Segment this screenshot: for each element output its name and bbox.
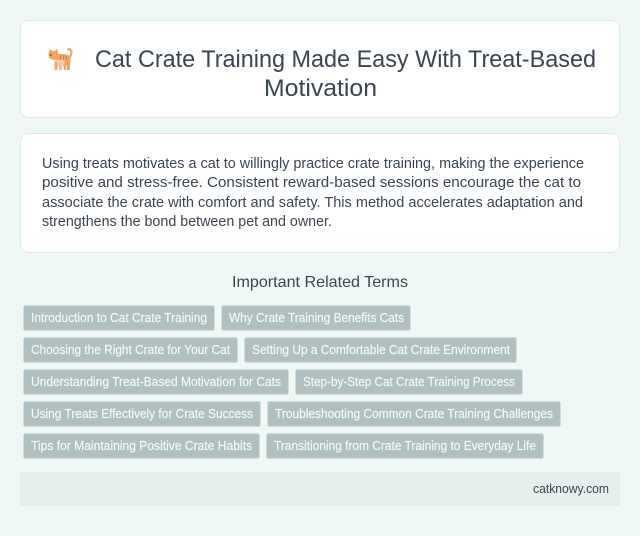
tag: Transitioning from Crate Training to Everyday Life <box>274 439 536 453</box>
tag: Introduction to Cat Crate Training <box>31 311 207 325</box>
tag: Tips for Maintaining Positive Crate Habits <box>31 439 252 453</box>
tag <box>268 402 560 426</box>
tag: Choosing the Right Crate for Your Cat <box>31 343 230 357</box>
heading: related terms: Important Related Terms <box>232 274 408 291</box>
tag: Setting Up a Comfortable Cat Crate Environment <box>252 343 510 357</box>
panel: description card <box>20 134 620 252</box>
tag <box>24 434 260 458</box>
tag <box>24 402 260 426</box>
tag <box>24 306 214 330</box>
panel: title card <box>20 20 620 118</box>
tag <box>24 338 238 362</box>
tag <box>24 370 288 394</box>
description text <box>42 156 584 230</box>
footer: catknowy.com <box>533 482 609 496</box>
tag <box>244 338 516 362</box>
title text: Motivation <box>264 75 377 102</box>
tag: Why Crate Training Benefits Cats <box>229 311 404 325</box>
icon: cat <box>48 48 73 70</box>
tag <box>266 434 544 458</box>
description text: associate the crate with comfort and safety. This method accelerates adaptation and <box>42 195 583 211</box>
description text: strengthens the bond between pet and owner. <box>42 214 332 230</box>
tag: Understanding Treat-Based Motivation for Cats <box>31 375 281 389</box>
title text: Cat Crate Training Made Easy With Treat-Based <box>95 46 596 73</box>
description text: Using treats motivates a cat to willingly practice crate training, making the experience <box>42 156 584 172</box>
tag: Troubleshooting Common Crate Training Challenges <box>275 407 553 421</box>
description text: positive and stress-free. Consistent reward-based sessions encourage the cat to <box>42 175 581 191</box>
tag list <box>24 306 560 458</box>
tag <box>222 306 410 330</box>
tag: Step-by-Step Cat Crate Training Process <box>303 375 515 389</box>
footer <box>20 472 620 506</box>
title text <box>95 46 596 102</box>
tag <box>296 370 522 394</box>
tag: Using Treats Effectively for Crate Success <box>31 407 253 421</box>
